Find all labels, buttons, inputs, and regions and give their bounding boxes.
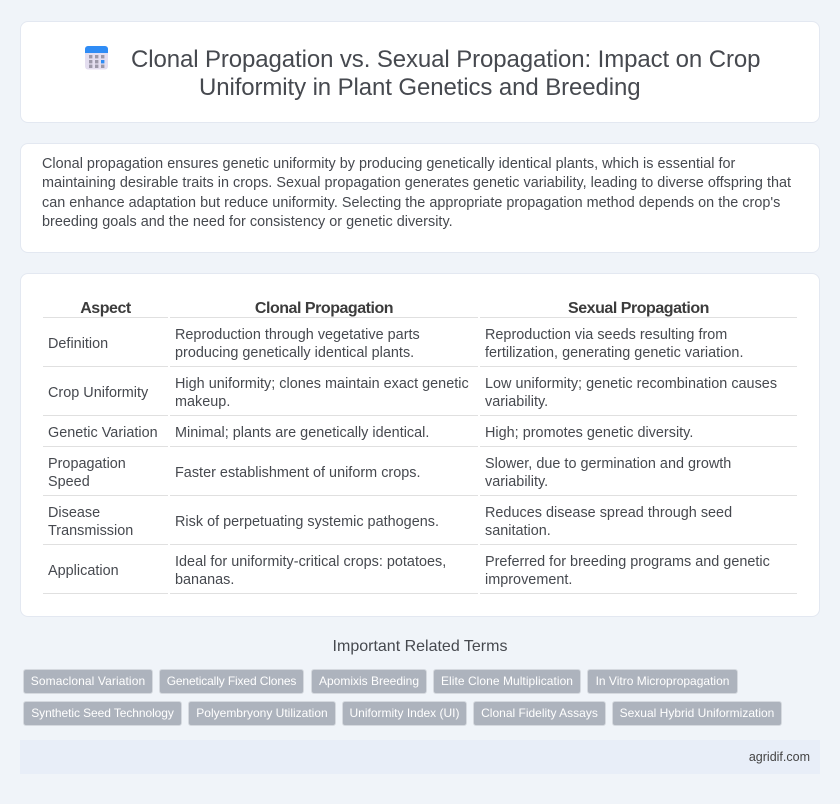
tag: Clonal Fidelity Assays xyxy=(481,706,598,720)
tag xyxy=(612,701,782,726)
tag xyxy=(473,701,606,726)
row: genetic variation xyxy=(43,425,797,447)
row: propagation speed: Faster establishment of uniform crops. xyxy=(175,465,420,481)
related terms heading: Important Related Terms xyxy=(333,638,507,655)
row: crop uniformity: High uniformity; clones maintain exact genetic xyxy=(175,376,469,392)
row: genetic variation: Minimal; plants are genetically identical. xyxy=(175,425,429,441)
icon: calendar xyxy=(85,46,108,70)
comparison table panel xyxy=(20,273,820,617)
row: genetic variation: High; promotes genetic diversity. xyxy=(485,425,693,441)
row: application xyxy=(43,554,797,594)
tag: Elite Clone Multiplication xyxy=(441,674,573,688)
title: Uniformity in Plant Genetics and Breeding xyxy=(199,74,640,101)
table header xyxy=(43,300,797,318)
intro paragraph xyxy=(42,156,791,230)
tag xyxy=(587,669,738,694)
table header: Clonal Propagation xyxy=(255,300,393,317)
table header: Aspect xyxy=(80,300,131,317)
tag: Genetically Fixed Clones xyxy=(167,674,296,688)
row: application: Application xyxy=(48,563,119,579)
comparison table xyxy=(43,300,797,594)
row: definition: Reproduction via seeds resulting from xyxy=(485,327,727,343)
footer source text: agridif.com xyxy=(749,750,810,764)
tag: Somaclonal Variation xyxy=(31,674,145,688)
intro paragraph: can enhance adaptation but reduce uniformity. Selecting the appropriate propagation method depends on the crop's xyxy=(42,195,780,211)
row: propagation speed xyxy=(43,456,797,496)
row: propagation speed: Propagation xyxy=(48,456,126,472)
row: application: bananas. xyxy=(175,572,234,588)
table header: Sexual Propagation xyxy=(568,300,709,317)
tag: Synthetic Seed Technology xyxy=(31,706,174,720)
row: crop uniformity: Crop Uniformity xyxy=(48,385,148,401)
intro paragraph: maintaining desirable traits in crops. Sexual propagation generates genetic variability, leading to diverse offspring that xyxy=(42,175,791,191)
title xyxy=(131,46,760,101)
tag xyxy=(23,701,182,726)
header panel xyxy=(20,21,820,123)
row: disease transmission xyxy=(43,505,797,545)
row: definition: Reproduction through vegetative parts xyxy=(175,327,420,343)
intro paragraph: breeding goals and the need for consistency or genetic diversity. xyxy=(42,214,453,230)
related terms tags xyxy=(23,669,782,726)
row: crop uniformity: variability. xyxy=(485,394,548,410)
tag xyxy=(188,701,336,726)
row: propagation speed: variability. xyxy=(485,474,548,490)
row: crop uniformity: makeup. xyxy=(175,394,230,410)
tag: Apomixis Breeding xyxy=(319,674,419,688)
title: Clonal Propagation vs. Sexual Propagation: Impact on Crop xyxy=(131,46,760,73)
tag xyxy=(342,701,467,726)
row: crop uniformity xyxy=(43,376,797,416)
row: disease transmission: Risk of perpetuating systemic pathogens. xyxy=(175,514,439,530)
tag: Sexual Hybrid Uniformization xyxy=(620,706,774,720)
intro paragraph: Clonal propagation ensures genetic uniformity by producing genetically identical plants, which is essential for xyxy=(42,156,735,172)
row: definition: producing genetically identical plants. xyxy=(175,345,414,361)
row: definition xyxy=(43,327,797,367)
row: propagation speed: Slower, due to germination and growth xyxy=(485,456,731,472)
row: definition: Definition xyxy=(48,336,108,352)
row: disease transmission: Reduces disease spread through seed xyxy=(485,505,732,521)
row: crop uniformity: Low uniformity; genetic recombination causes xyxy=(485,376,777,392)
row: application: improvement. xyxy=(485,572,572,588)
tag: In Vitro Micropropagation xyxy=(596,674,729,688)
tag xyxy=(433,669,581,694)
tag: Polyembryony Utilization xyxy=(196,706,328,720)
tag: Uniformity Index (UI) xyxy=(349,706,460,720)
row: disease transmission: Transmission xyxy=(48,523,133,539)
row: disease transmission: sanitation. xyxy=(485,523,551,539)
row: application: Ideal for uniformity-critical crops: potatoes, xyxy=(175,554,446,570)
row: application: Preferred for breeding programs and genetic xyxy=(485,554,770,570)
tag xyxy=(159,669,304,694)
tag xyxy=(23,669,153,694)
row: disease transmission: Disease xyxy=(48,505,100,521)
row: genetic variation: Genetic Variation xyxy=(48,425,158,441)
tag xyxy=(311,669,427,694)
footer bar xyxy=(20,740,820,774)
intro text panel xyxy=(20,143,820,253)
row: propagation speed: Speed xyxy=(48,474,90,490)
row: definition: fertilization, generating genetic variation. xyxy=(485,345,743,361)
